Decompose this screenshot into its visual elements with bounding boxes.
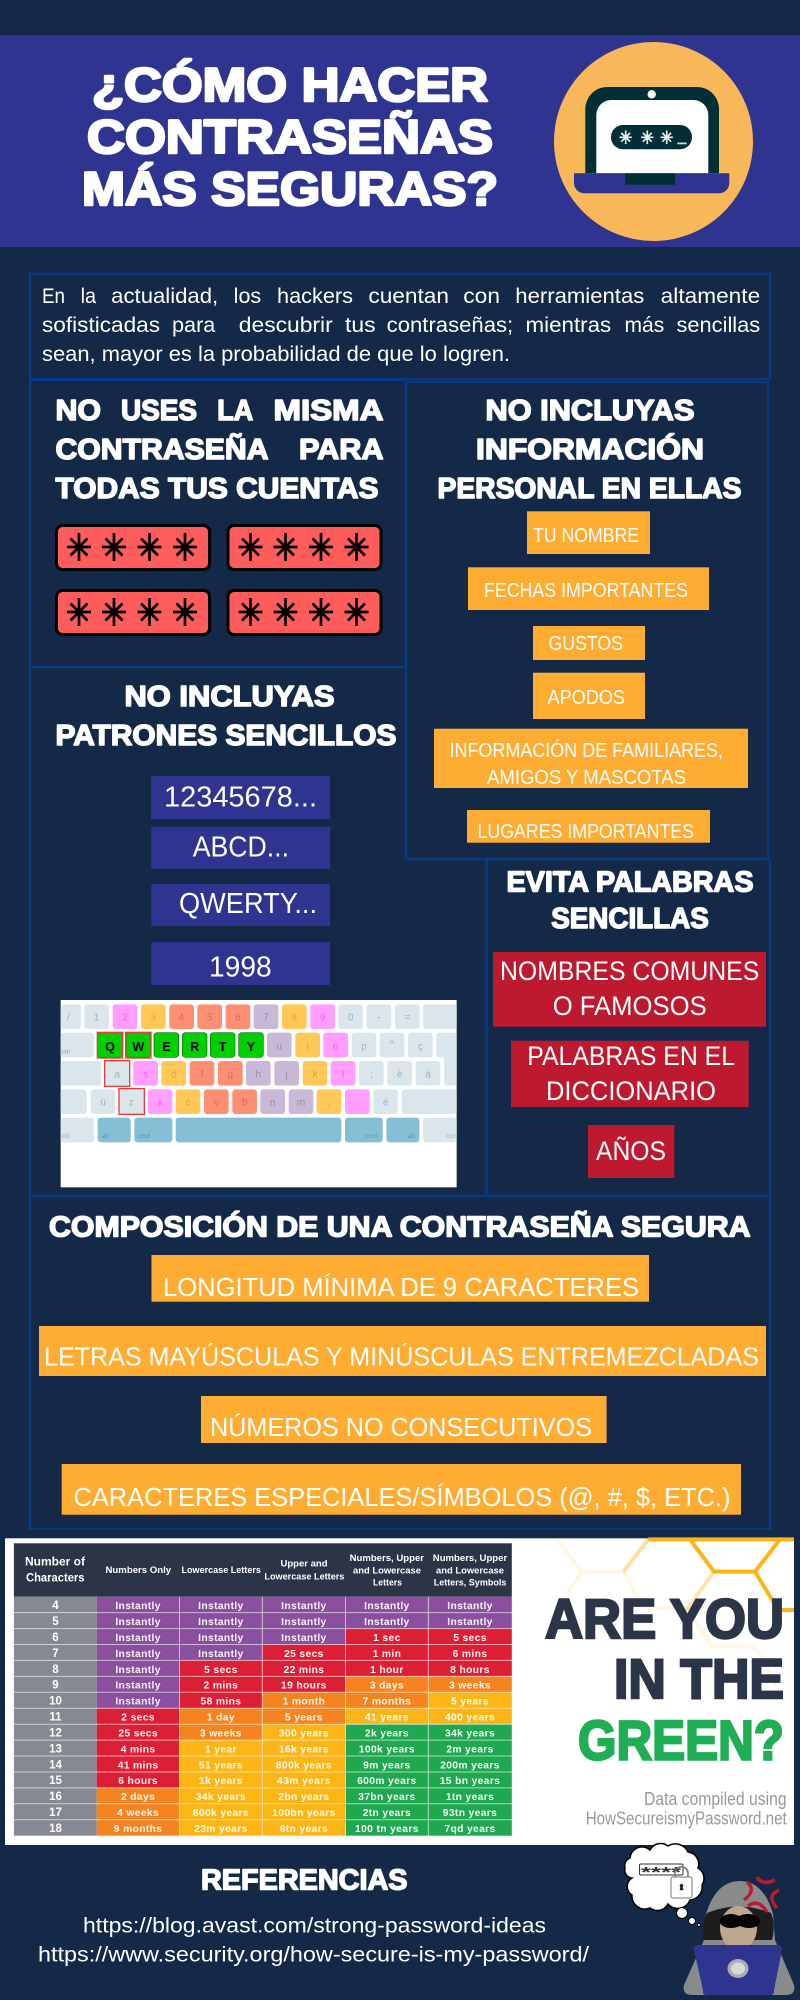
table row: 6 characters: Instantly <box>281 1633 327 1644</box>
table row: 14 characters: 41 mins <box>118 1760 158 1771</box>
table row: 15 characters: 15 bn years <box>440 1776 500 1787</box>
table row: 5 characters: Instantly <box>364 1617 410 1628</box>
heading: evita palabras sencillas: SENCILLAS <box>551 903 709 935</box>
chart panel: time to crack passwords <box>5 1538 794 1845</box>
table colour cells <box>14 1597 512 1836</box>
table row: 16 characters: 37bn years <box>358 1792 416 1803</box>
heading: no incluyas patrones sencillos: NO INCLUYAS <box>124 681 334 713</box>
heading: referencias: REFERENCIAS <box>201 1864 408 1896</box>
keyboard illustration: 7 <box>263 1013 269 1024</box>
tag: fechas importantes <box>468 567 709 610</box>
pattern: 12345678: 12345678... <box>164 782 317 814</box>
table row: 18 characters: 6tn years <box>280 1824 328 1835</box>
table row: 10 characters <box>49 1696 489 1708</box>
table row: 4 characters: Instantly <box>198 1601 244 1612</box>
tag: tu nombre <box>527 511 650 554</box>
table row: 13 characters: 13 <box>49 1743 62 1755</box>
table row: 6 characters <box>52 1632 487 1644</box>
intro text: sencillas <box>676 314 760 337</box>
intro text: más <box>624 314 664 337</box>
references <box>38 1864 589 1967</box>
keyboard illustration: n <box>270 1098 275 1109</box>
table header: Numbers Only <box>106 1564 172 1575</box>
intro text: la <box>81 285 96 308</box>
table row: 6 characters: 5 secs <box>453 1633 487 1644</box>
keyboard illustration: à <box>425 1069 431 1080</box>
heading: composición de una contraseña segura: COMPOSICIÓN DE UNA CONTRASEÑA SEGURA <box>49 1212 750 1244</box>
table row: 6 characters: Instantly <box>198 1633 244 1644</box>
password box 4 <box>228 590 381 634</box>
table row: 5 characters: 5 <box>52 1616 59 1628</box>
keyboard illustration: k <box>312 1069 317 1080</box>
heading: no uses la misma contraseña: CONTRASEÑA <box>56 434 268 466</box>
table row: 10 characters: 5 years <box>451 1697 489 1708</box>
keyboard illustration: / <box>67 1013 70 1024</box>
keyboard illustration: Y <box>247 1040 256 1054</box>
keyboard illustration: . <box>356 1098 359 1109</box>
table row: 8 characters: 5 secs <box>204 1665 238 1676</box>
table row: 17 characters: 4 weeks <box>117 1808 159 1819</box>
heading: no uses la misma contraseña: NO <box>56 395 101 427</box>
table row: 4 characters: 4 <box>52 1600 59 1612</box>
keyboard illustration: è <box>397 1069 403 1080</box>
table row: 10 characters: 7 months <box>363 1697 411 1708</box>
pattern: 12345678 <box>151 776 330 819</box>
tag: gustos: GUSTOS <box>548 632 623 655</box>
title <box>82 58 498 215</box>
table row: 16 characters: 1tn years <box>446 1792 494 1803</box>
table row: 15 characters: 1k years <box>199 1776 243 1787</box>
keyboard illustration: s <box>143 1069 148 1080</box>
keyboard illustration: cmd <box>365 1133 377 1140</box>
tag: lugares importantes <box>467 810 710 843</box>
tag: números no consecutivos: NÚMEROS NO CONSECUTIVOS <box>210 1413 592 1442</box>
keyboard illustration: ctrl <box>61 1133 70 1140</box>
table header: Numbers, Upper <box>350 1552 424 1563</box>
honeycomb background <box>557 1539 794 1687</box>
table row: 9 characters: 3 days <box>370 1681 404 1692</box>
keyboard illustration: 8 <box>292 1013 298 1024</box>
table row: 5 characters: Instantly <box>198 1617 244 1628</box>
keyboard illustration: i <box>307 1041 309 1052</box>
tag: longitud mínima: LONGITUD MÍNIMA DE 9 CARACTERES <box>163 1273 639 1302</box>
tag: lugares importantes: LUGARES IMPORTANTES <box>478 820 694 843</box>
pattern: 1998: 1998 <box>209 952 272 984</box>
table row: 5 characters: Instantly <box>115 1617 161 1628</box>
keyboard illustration: v <box>214 1098 219 1109</box>
pattern: ABCD <box>151 827 330 869</box>
table row: 12 characters: 12 <box>49 1727 62 1739</box>
intro text: contraseñas; <box>387 314 513 337</box>
face <box>720 1906 757 1950</box>
table header: Lowercase Letters <box>182 1564 261 1575</box>
icon: laptop with password in orange circle <box>554 42 753 241</box>
table row: 4 characters: Instantly <box>364 1601 410 1612</box>
table row: 15 characters: 15 <box>49 1775 62 1787</box>
keyboard illustration: f <box>201 1069 204 1080</box>
pattern: QWERTY <box>151 884 330 926</box>
table row: 11 characters: 1 day <box>207 1712 235 1724</box>
table row: 12 characters: 2k years <box>365 1728 409 1739</box>
heading: no incluyas información personal: PERSONAL EN ELLAS <box>438 473 742 505</box>
pattern: 1998 <box>151 942 330 985</box>
keyboard illustration: g <box>228 1069 233 1080</box>
table row: 17 characters: 800k years <box>193 1808 249 1819</box>
table row: 4 characters <box>52 1600 493 1612</box>
link: avast: https://blog.avast.com/strong-password-ideas <box>83 1914 546 1938</box>
tag: nombres comunes o famosos: O FAMOSOS <box>553 991 707 1021</box>
thought bubble <box>625 1843 704 1926</box>
table row: 17 characters: 93tn years <box>443 1808 497 1819</box>
heading: no uses la misma contraseña: LA <box>217 395 253 427</box>
keyboard illustration: d <box>171 1069 176 1080</box>
table row: 9 characters: 3 weeks <box>449 1681 491 1692</box>
table header: and Lowercase <box>436 1564 504 1575</box>
heading: evita palabras sencillas <box>506 866 754 935</box>
keyboard illustration: = <box>404 1013 410 1024</box>
tag: años <box>588 1125 674 1178</box>
keyboard illustration: 0 <box>348 1013 354 1024</box>
table row: 8 characters: 8 <box>52 1664 59 1676</box>
table row: 10 characters: Instantly <box>115 1697 161 1708</box>
tag: palabras en el diccionario: PALABRAS EN EL <box>527 1041 735 1071</box>
heading: no incluyas patrones sencillos: PATRONES SENCILLOS <box>56 720 396 752</box>
keyboard illustration: ctrl <box>447 1133 455 1140</box>
table row: 7 characters: 1 min <box>373 1649 401 1660</box>
intro text: hackers <box>277 285 353 308</box>
table row: 13 characters: 2m years <box>446 1744 494 1755</box>
anger marks <box>744 1877 779 1912</box>
intro text: herramientas <box>515 285 644 308</box>
intro text: con <box>463 285 500 308</box>
table row: 16 characters: 2 days <box>121 1792 155 1803</box>
table row: 10 characters: 1 month <box>283 1697 325 1708</box>
table row: 18 characters: 23m years <box>194 1824 248 1835</box>
tag: letras mayúsculas y minúsculas <box>39 1326 766 1376</box>
table row: 7 characters: 7 <box>52 1648 59 1660</box>
keyboard illustration: o <box>333 1041 339 1052</box>
keyboard illustration: x <box>157 1098 162 1109</box>
table row: 12 characters <box>49 1727 495 1739</box>
password box 1 <box>56 526 210 570</box>
keyboard illustration <box>61 1000 457 1187</box>
link: security.org: https://www.security.org/how-secure-is-my-password/ <box>38 1943 589 1967</box>
keyboard illustration: Q <box>105 1040 115 1054</box>
keyboard illustration: T <box>219 1040 227 1054</box>
intro text: En <box>42 285 65 308</box>
table row: 6 characters: 6 <box>52 1632 59 1644</box>
table row: 9 characters: 9 <box>52 1680 59 1692</box>
table row: 16 characters: 2bn years <box>278 1792 330 1803</box>
intro text: sean, mayor es la probabilidad de que lo logren. <box>42 343 510 366</box>
table row: 9 characters: 19 hours <box>281 1681 327 1692</box>
table row: 5 characters: Instantly <box>447 1617 493 1628</box>
title: MÁS SEGURAS? <box>82 162 498 215</box>
keyboard illustration: b <box>242 1098 248 1109</box>
table row: 7 characters: 6 mins <box>453 1649 487 1660</box>
tag: nombres comunes o famosos <box>493 952 766 1027</box>
keyboard illustration: 4 <box>179 1013 185 1024</box>
heading: no uses la misma contraseña <box>56 395 384 505</box>
tag: tu nombre: TU NOMBRE <box>533 524 639 547</box>
keyboard illustration: é <box>383 1098 389 1109</box>
heading: no uses la misma contraseña: MISMA <box>274 395 384 427</box>
panel: simple patterns <box>30 667 486 1196</box>
tag: palabras en el diccionario <box>511 1041 749 1107</box>
table header: Number of <box>25 1555 86 1569</box>
keyboard illustration: ù <box>100 1098 106 1109</box>
table row: 16 characters <box>49 1791 494 1803</box>
table row: 17 characters: 17 <box>49 1807 62 1819</box>
keyboard illustration: ; <box>370 1069 373 1080</box>
heading: no uses la misma contraseña: PARA <box>299 434 384 466</box>
table row: 15 characters: 600m years <box>357 1776 417 1787</box>
title: ¿CÓMO HACER <box>92 58 488 111</box>
tag: caracteres especiales <box>62 1464 741 1515</box>
keyboard illustration: a <box>115 1069 121 1080</box>
table row: 18 characters: 100 tn years <box>355 1824 419 1835</box>
table header <box>14 1543 512 1597</box>
slogan: are you in the green <box>545 1588 784 1772</box>
heading: no incluyas información personal: NO INCLUYAS <box>486 395 694 427</box>
table header: Numbers, Upper <box>433 1552 508 1563</box>
table row: 14 characters: 200m years <box>440 1760 500 1771</box>
slogan: are you in the green: ARE YOU <box>545 1588 784 1650</box>
table row: 18 characters: 18 <box>49 1823 62 1835</box>
table row: 8 characters: 1 hour <box>370 1665 404 1676</box>
intro panel <box>30 274 770 379</box>
panel: no reuse password <box>30 380 406 667</box>
table row: 14 characters: 800k years <box>276 1760 332 1771</box>
table row: 9 characters: Instantly <box>115 1681 161 1692</box>
keyboard illustration: l <box>342 1069 344 1080</box>
heading: no uses la misma contraseña: USES <box>121 395 197 427</box>
tag: longitud mínima <box>152 1255 649 1302</box>
mask <box>720 1914 760 1928</box>
keyboard illustration: p <box>361 1041 367 1052</box>
table row: 16 characters: 34k years <box>196 1792 246 1803</box>
table row: 17 characters <box>49 1807 497 1819</box>
table row: 14 characters: 51 years <box>199 1760 243 1771</box>
keyboard illustration: m <box>297 1098 305 1109</box>
table row: 13 characters: 100k years <box>359 1744 415 1755</box>
keyboard illustration: E <box>162 1040 171 1054</box>
title: CONTRASEÑAS <box>87 110 493 163</box>
table row: 18 characters: 7qd years <box>444 1824 496 1835</box>
table header: Upper and <box>280 1558 328 1569</box>
heading: no uses la misma contraseña: TODAS TUS CUENTAS <box>56 473 379 505</box>
table row: 11 characters: 2 secs <box>121 1712 155 1724</box>
table row: 14 characters <box>49 1759 500 1771</box>
table row: 7 characters <box>52 1648 487 1660</box>
intro text: descubrir <box>239 314 333 337</box>
intro text <box>42 285 760 366</box>
table row: 12 characters: 34k years <box>445 1728 495 1739</box>
intro text: mientras <box>526 314 611 337</box>
keyboard illustration: ç <box>418 1041 423 1052</box>
intro text: altamente <box>661 285 760 308</box>
table row: 13 characters <box>49 1743 494 1755</box>
panel: no personal information <box>406 382 768 859</box>
slogan: are you in the green: IN THE <box>614 1648 784 1710</box>
table row: 8 characters: 8 hours <box>450 1665 490 1676</box>
heading: no incluyas patrones sencillos <box>56 681 396 752</box>
tag: letras mayúsculas y minúsculas: LETRAS MAYÚSCULAS Y MINÚSCULAS ENTREMEZCLADAS <box>44 1343 759 1372</box>
keyboard illustration: c <box>185 1098 190 1109</box>
tag: apodos <box>533 673 645 719</box>
keyboard illustration: , <box>328 1098 330 1109</box>
intro text: para <box>172 314 216 337</box>
heading: no incluyas información personal <box>438 395 742 505</box>
table row: 17 characters: 2tn years <box>363 1808 411 1819</box>
keyboard illustration: W <box>132 1040 144 1054</box>
table row: 17 characters: 100bn years <box>272 1808 336 1819</box>
table row: 15 characters <box>49 1775 500 1787</box>
table row: 15 characters: 6 hours <box>118 1776 158 1787</box>
intro text: tus <box>345 314 376 337</box>
tag: gustos <box>533 626 645 660</box>
table row: 18 characters: 9 months <box>114 1824 162 1835</box>
table row: 10 characters: 58 mins <box>201 1697 241 1708</box>
table header: Letters <box>373 1577 402 1588</box>
table row: 11 characters: 11 <box>49 1712 62 1724</box>
tag: información de familiares <box>434 729 748 789</box>
table row: 8 characters <box>52 1664 490 1676</box>
table row: 15 characters: 43m years <box>277 1776 331 1787</box>
intro text: cuentan <box>368 285 449 308</box>
keyboard illustration: cmd <box>138 1133 151 1140</box>
intro text: sofisticadas <box>42 314 160 337</box>
keyboard illustration: 9 <box>320 1013 326 1024</box>
table row: 4 characters: Instantly <box>281 1601 327 1612</box>
table row: 13 characters: 1 year <box>205 1744 237 1755</box>
tag: caracteres especiales: CARACTERES ESPECIALES/SÍMBOLOS (@, #, $, ETC.) <box>74 1483 730 1512</box>
keyboard illustration: tab <box>61 1049 71 1056</box>
table row: 13 characters: 16k years <box>279 1744 329 1755</box>
table row: 4 characters: Instantly <box>447 1601 493 1612</box>
table row: 18 characters <box>49 1823 496 1835</box>
pattern: ABCD: ABCD... <box>193 832 289 864</box>
table row: 12 characters: 25 secs <box>118 1728 158 1739</box>
table row: 5 characters <box>52 1616 493 1628</box>
table row: 6 characters: 1 sec <box>373 1633 401 1644</box>
table row: 5 characters: Instantly <box>281 1617 327 1628</box>
intro text: actualidad, <box>111 285 218 308</box>
keyboard illustration: 5 <box>207 1013 213 1024</box>
table row: 9 characters: 2 mins <box>204 1681 238 1692</box>
table row: 4 characters: Instantly <box>115 1601 161 1612</box>
keyboard illustration: z <box>129 1098 134 1109</box>
table header: and Lowercase <box>353 1564 421 1575</box>
tag: nombres comunes o famosos: NOMBRES COMUNES <box>500 956 759 986</box>
heading: evita palabras sencillas: EVITA PALABRAS <box>506 866 754 898</box>
tag: números no consecutivos <box>201 1396 607 1443</box>
data source note <box>586 1788 787 1828</box>
keyboard illustration: R <box>190 1040 199 1054</box>
password box 3 <box>56 590 210 634</box>
table header: Letters, Symbols <box>434 1577 506 1588</box>
tag: apodos: APODOS <box>548 686 625 709</box>
keyboard illustration: 3 <box>151 1013 157 1024</box>
keyboard illustration: 1 <box>94 1013 100 1024</box>
table row: 8 characters: Instantly <box>115 1665 161 1676</box>
table row: 14 characters: 14 <box>49 1759 62 1771</box>
table row: 9 characters <box>52 1680 491 1692</box>
keyboard illustration: 6 <box>235 1013 241 1024</box>
table header: Lowercase Letters <box>264 1570 344 1581</box>
table row: 14 characters: 9m years <box>363 1760 411 1771</box>
hacker body and hood <box>684 1881 794 1995</box>
table row: 11 characters <box>49 1712 495 1724</box>
hood shadow <box>703 1906 774 1940</box>
table row: 11 characters: 5 years <box>285 1712 323 1724</box>
password box 2 <box>228 526 381 570</box>
tag: información de familiares: INFORMACIÓN DE FAMILIARES, <box>450 739 723 762</box>
tag: información de familiares: AMIGOS Y MASCOTAS <box>487 766 686 789</box>
tag: años: AÑOS <box>596 1136 666 1166</box>
table header: Characters <box>26 1571 85 1585</box>
table row: 12 characters: 3 weeks <box>200 1728 242 1739</box>
keyboard illustration: alt <box>102 1133 109 1140</box>
intro text: los <box>234 285 261 308</box>
keyboard illustration: j <box>285 1069 288 1080</box>
header banner <box>0 35 800 247</box>
keyboard illustration: ^ <box>390 1039 395 1050</box>
table row: 16 characters: 16 <box>49 1791 62 1803</box>
table row: 7 characters: Instantly <box>115 1649 161 1660</box>
table row: 7 characters: Instantly <box>198 1649 244 1660</box>
keyboard illustration: 2 <box>122 1013 128 1024</box>
keyboard illustration: h <box>256 1069 261 1080</box>
table row: 6 characters: Instantly <box>115 1633 161 1644</box>
keyboard illustration: - <box>377 1013 381 1024</box>
keyboard illustration: alt <box>408 1133 415 1140</box>
table row: 11 characters: 41 years <box>365 1712 409 1724</box>
panel: composition of a secure password <box>30 1196 770 1529</box>
table row: 8 characters: 22 mins <box>284 1665 324 1676</box>
laptop <box>694 1945 782 1995</box>
table row: 12 characters: 300 years <box>279 1728 329 1739</box>
table row: 7 characters: 25 secs <box>284 1649 324 1660</box>
pattern: QWERTY: QWERTY... <box>179 888 317 920</box>
table row: 13 characters: 4 mins <box>121 1744 155 1755</box>
keyboard illustration: u <box>277 1041 282 1052</box>
table row: 10 characters: 10 <box>49 1696 62 1708</box>
icon: angry hacker with laptop <box>625 1843 794 1995</box>
tag: palabras en el diccionario: DICCIONARIO <box>546 1076 716 1106</box>
heading: no incluyas información personal: INFORMACIÓN <box>476 434 704 466</box>
thought bubble: **** <box>641 1864 681 1881</box>
panel: avoid simple words <box>487 859 770 1196</box>
tag: fechas importantes: FECHAS IMPORTANTES <box>484 579 688 602</box>
table row: 11 characters: 400 years <box>445 1712 495 1724</box>
